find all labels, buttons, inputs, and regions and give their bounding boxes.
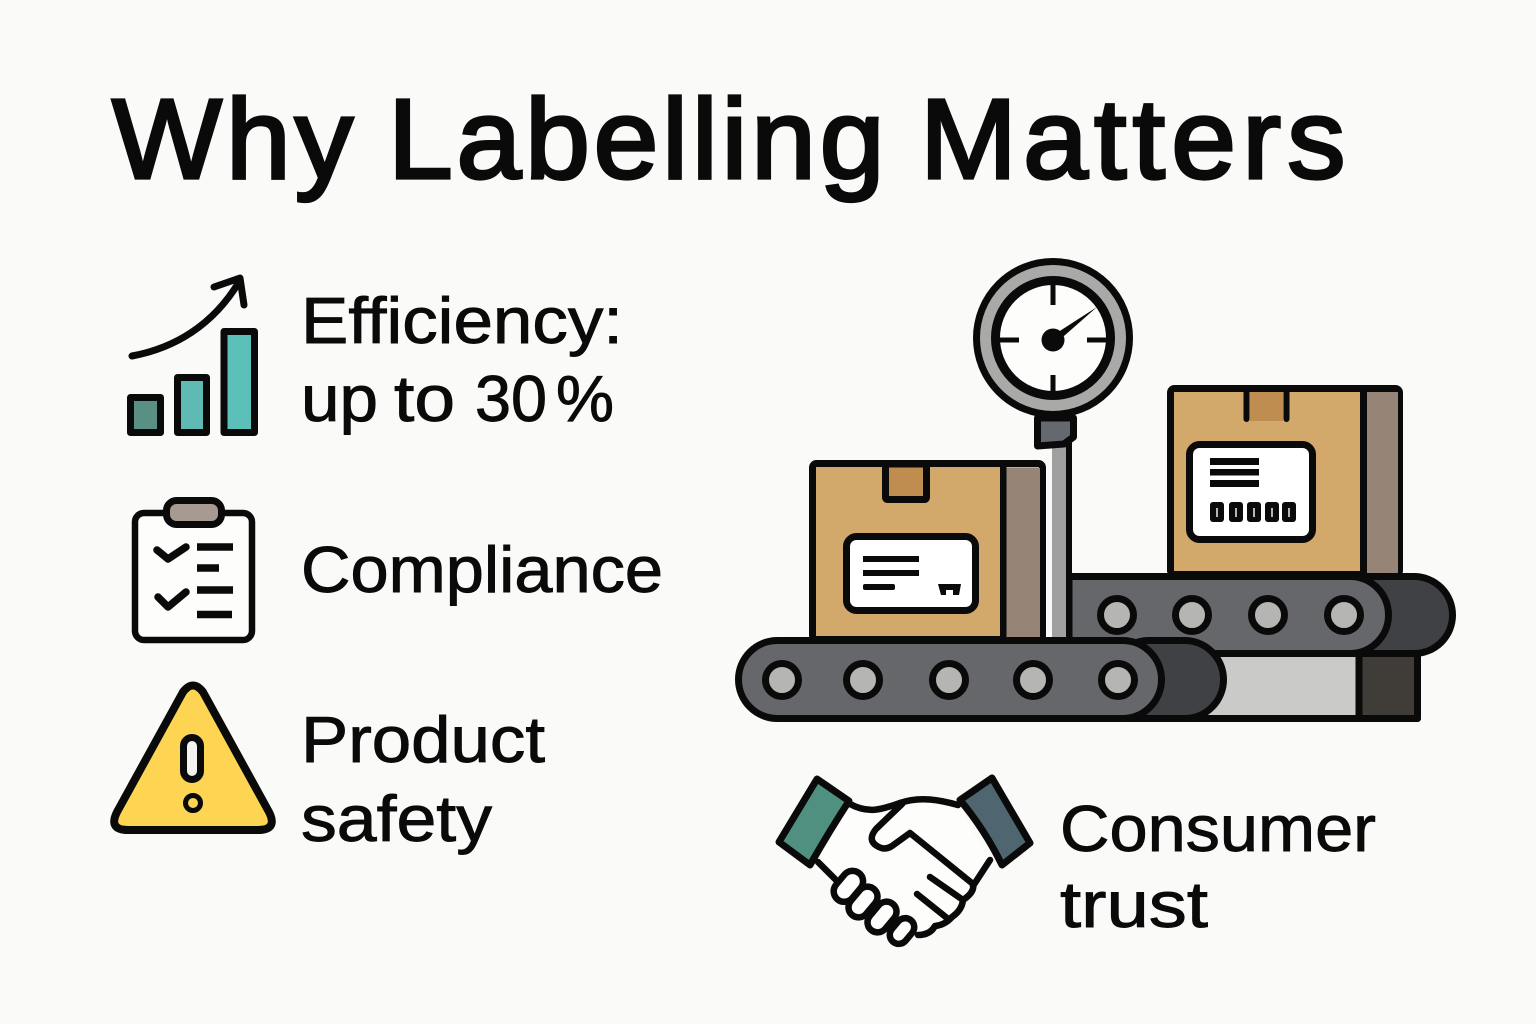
front conveyor — [738, 640, 1224, 718]
text: consumer trust — [1060, 792, 1376, 941]
front box — [812, 464, 1042, 640]
text: efficiency — [301, 284, 623, 435]
text: efficiency: % — [556, 362, 614, 435]
text: consumer trust: Consumer — [1060, 792, 1376, 865]
text: efficiency: up — [301, 362, 378, 435]
icon: handshake — [779, 778, 1030, 948]
illustration: conveyor with boxes and scale — [738, 262, 1452, 718]
icon: warning triangle — [114, 686, 272, 830]
icon: clipboard checklist — [135, 500, 252, 640]
text: product safety — [301, 703, 545, 855]
title: Labelling — [388, 77, 884, 203]
back box — [1170, 388, 1400, 574]
title — [112, 77, 1345, 203]
text: product safety: Product — [301, 703, 545, 776]
icon: efficiency bar chart — [130, 278, 254, 432]
text: efficiency: to — [394, 362, 455, 435]
back conveyor — [1069, 576, 1452, 718]
text: product safety: safety — [301, 782, 493, 855]
scale gauge — [976, 262, 1130, 640]
text: compliance: Compliance — [301, 533, 663, 606]
text: efficiency: Efficiency: — [301, 284, 623, 357]
text: efficiency: 30 — [475, 362, 547, 435]
text: consumer trust: trust — [1060, 868, 1208, 941]
title: Why — [112, 77, 354, 203]
title: Matters — [920, 77, 1345, 203]
